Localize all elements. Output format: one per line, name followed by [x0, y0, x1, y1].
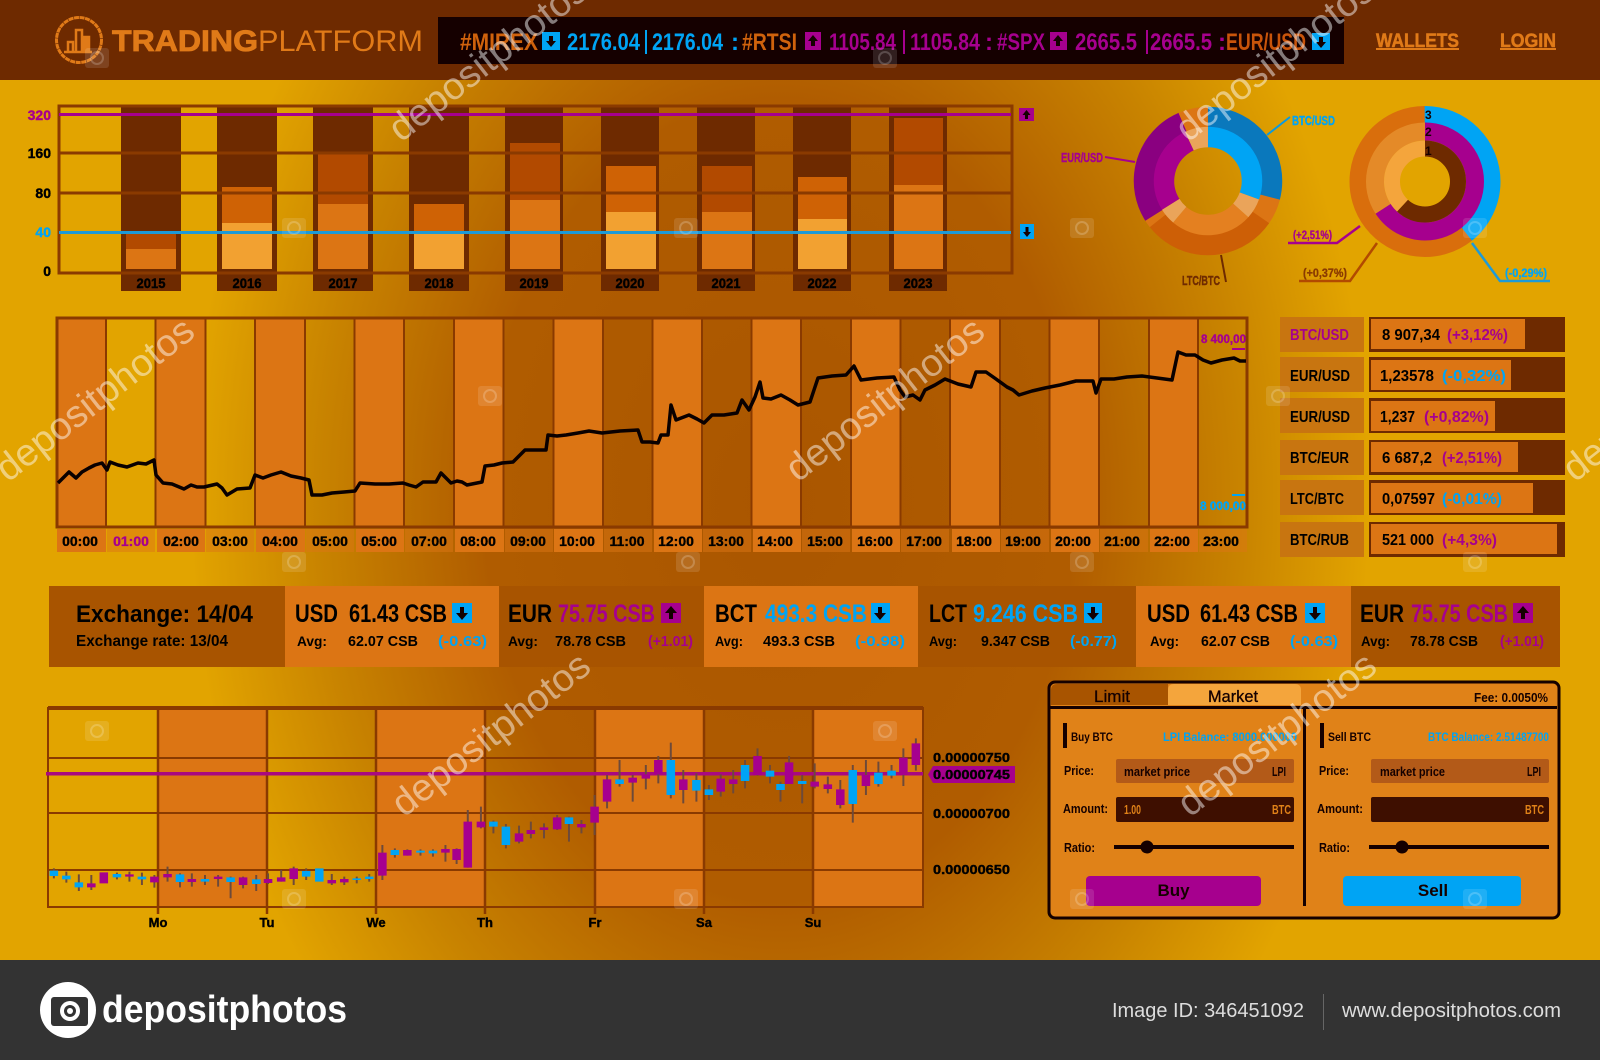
- EUR cell 2: 75.75 CSB: [1411, 600, 1508, 628]
- year labels: 2022: [808, 275, 837, 291]
- chart grid: [59, 106, 1012, 273]
- hour columns: [56, 317, 1199, 528]
- BCT cell: 493.3 CSB: [765, 600, 867, 628]
- USD cell 2: 62.07 CSB: [1201, 633, 1270, 650]
- row EUR/USD 1: (-0,32%): [1442, 368, 1506, 385]
- price line: [58, 352, 1246, 495]
- BCT cell: Avg:: [715, 633, 743, 649]
- row EUR/USD 2: EUR/USD: [1290, 409, 1350, 426]
- row EUR/USD 2: 1,237: [1380, 409, 1415, 426]
- ticker: [438, 17, 1344, 64]
- sell form: BTC: [1525, 802, 1544, 817]
- sell form: Ratio:: [1319, 840, 1350, 855]
- ring numbers: 2: [1425, 125, 1432, 139]
- sell form: Amount:: [1317, 801, 1363, 816]
- donut 1 label: LTC/BTC: LTC/BTC: [1182, 273, 1220, 288]
- hour labels: 18:00: [956, 533, 992, 549]
- donut 2 callout: orange: [1299, 243, 1377, 281]
- weekday labels: Mo: [149, 915, 167, 930]
- USD cell 2: Avg:: [1150, 633, 1179, 649]
- row BTC/USD: (+3,12%): [1447, 327, 1508, 344]
- hour labels: 17:00: [906, 533, 942, 549]
- EUR cell: 75.75 CSB: [558, 600, 655, 628]
- footer brand: depositphotos: [102, 989, 347, 1031]
- hour labels: 11:00: [609, 533, 645, 549]
- row EUR/USD 2: [1280, 398, 1565, 433]
- ticker: #MIREX: [460, 29, 538, 56]
- EUR cell 2: 78.78 CSB: [1410, 633, 1478, 650]
- sell form: [1317, 723, 1549, 906]
- donut 2 callout: orange: (+0,37%): [1303, 266, 1347, 280]
- ticker: #SPX: [997, 29, 1045, 56]
- y axis labels: 0: [43, 263, 51, 279]
- weekday labels: Su: [805, 915, 821, 930]
- row LTC/BTC: [1280, 480, 1565, 515]
- image id: Image ID: 346451092: [1112, 1000, 1304, 1022]
- row BTC/EUR: BTC/EUR: [1290, 450, 1349, 467]
- donut 2 callout: magenta: (+2,51%): [1293, 228, 1332, 242]
- price axis labels: 0.00000700: [933, 806, 1010, 821]
- weekday labels: [149, 915, 821, 930]
- price axis labels: [933, 750, 1010, 877]
- year labels: 2016: [232, 275, 262, 291]
- ticker: 2176.04: [567, 29, 641, 56]
- row LTC/BTC: (-0,01%): [1442, 491, 1502, 508]
- BCT cell: 493.3 CSB: [763, 633, 835, 650]
- hour labels: 05:00: [361, 533, 397, 549]
- high label: 8 400,00: [1201, 332, 1246, 346]
- header bar: [0, 0, 1600, 80]
- LCT cell: LCT: [929, 600, 967, 628]
- hour labels: 22:00: [1154, 533, 1190, 549]
- hour labels: 07:00: [411, 533, 447, 549]
- watermarks: depositphotos: [778, 309, 993, 490]
- hour labels: 04:00: [262, 533, 298, 549]
- year labels: 2015: [136, 275, 166, 291]
- buy form: Buy BTC: [1071, 730, 1113, 744]
- sell form: Sell BTC: [1328, 730, 1371, 744]
- frame and dividers: [57, 318, 1247, 527]
- logo: TRADING: [112, 25, 258, 58]
- ring numbers: [1425, 108, 1432, 158]
- price axis labels: 0.00000750: [933, 750, 1010, 765]
- EUR cell: EUR: [508, 600, 552, 628]
- hour labels: 20:00: [1055, 533, 1091, 549]
- button: buy: Buy: [1157, 881, 1190, 900]
- buy form: Amount:: [1063, 801, 1108, 816]
- EUR cell 2: Avg:: [1361, 633, 1390, 649]
- low label: 8 000,00: [1200, 499, 1246, 513]
- ring numbers: 1: [1425, 144, 1432, 158]
- current price tag: 0.00000745: [933, 767, 1010, 782]
- buy form: market price: [1124, 764, 1190, 779]
- USD cell: USD: [295, 600, 338, 628]
- row EUR/USD 1: EUR/USD: [1290, 368, 1350, 385]
- donut 2 callout: blue: [1472, 243, 1550, 281]
- row BTC/USD: BTC/USD: [1290, 327, 1349, 344]
- EUR cell 2: EUR: [1360, 600, 1404, 628]
- hour labels: 05:00: [312, 533, 348, 549]
- ticker: EUR/USD: [1226, 29, 1306, 56]
- row EUR/USD 1: 1,23578: [1380, 368, 1434, 385]
- buy form: [1063, 723, 1297, 906]
- row BTC/EUR: [1280, 440, 1565, 475]
- USD cell: (-0.63): [438, 633, 487, 650]
- footer bar: [0, 960, 1600, 1060]
- LCT cell: 9.347 CSB: [981, 633, 1050, 650]
- hour labels: 15:00: [807, 533, 843, 549]
- exchange date cell: Exchange: 14/04: [76, 601, 254, 628]
- sell form: Price:: [1319, 763, 1349, 778]
- fee: Fee: 0.0050%: [1474, 690, 1548, 705]
- chart frame and grid: [48, 707, 923, 914]
- hour labels: 10:00: [559, 533, 595, 549]
- hour labels: 23:00: [1203, 533, 1239, 549]
- LCT cell: 9.246 CSB: [973, 600, 1078, 628]
- stacked bar chart: [28, 105, 1034, 291]
- y axis labels: 320: [28, 107, 51, 123]
- hour labels: 02:00: [163, 533, 199, 549]
- EUR cell 2: [1351, 586, 1560, 667]
- donut 1 label: EUR/USD: EUR/USD: [1061, 150, 1103, 165]
- ticker: #RTSI: [742, 29, 797, 56]
- exchange date cell: [49, 586, 285, 667]
- row EUR/USD 2: (+0,82%): [1424, 409, 1489, 426]
- row LTC/BTC: LTC/BTC: [1290, 491, 1344, 508]
- donut 1 label: BTC/USD: BTC/USD: [1292, 113, 1335, 128]
- exchange date cell: Exchange rate: 13/04: [76, 633, 228, 650]
- EUR cell 2: (+1.01): [1500, 633, 1544, 650]
- y axis labels: 80: [35, 185, 51, 201]
- year labels: 2019: [520, 275, 549, 291]
- weekday labels: Th: [477, 915, 493, 930]
- button: buy: [1086, 876, 1261, 906]
- USD cell: 61.43 CSB: [349, 600, 447, 628]
- reference line: upper: [59, 113, 1011, 116]
- tab: limit: [1051, 684, 1168, 706]
- ticker: 2665.5: [1150, 29, 1212, 56]
- ring numbers: 3: [1425, 108, 1432, 122]
- exchange strip: [49, 586, 1560, 667]
- ticker: 1105.84: [910, 29, 981, 56]
- year labels: 2020: [616, 275, 645, 291]
- buy form: 1.00: [1124, 802, 1141, 817]
- row BTC/USD: [1280, 317, 1565, 352]
- sell form: market price: [1380, 764, 1445, 779]
- BCT cell: (-0.98): [855, 633, 905, 650]
- nav: login: LOGIN: [1500, 31, 1556, 52]
- USD cell: [285, 586, 499, 667]
- y axis labels: 40: [35, 224, 51, 240]
- row BTC/RUB: (+4,3%): [1442, 532, 1497, 549]
- tab: market: Market: [1208, 687, 1258, 706]
- nav: wallets: WALLETS: [1376, 31, 1459, 52]
- hour labels: 00:00: [62, 533, 98, 549]
- hour labels: 03:00: [212, 533, 248, 549]
- row LTC/BTC: 0,07597: [1382, 491, 1435, 508]
- pair list: [1280, 317, 1565, 557]
- BCT cell: [704, 586, 918, 667]
- hour labels: 16:00: [857, 533, 893, 549]
- row BTC/EUR: (+2,51%): [1442, 450, 1502, 467]
- current price tag: [928, 766, 1015, 783]
- logo: [56, 18, 423, 62]
- donut 1 label: LTC/BTC: [1182, 255, 1226, 288]
- main line chart: [56, 317, 1247, 552]
- LCT cell: [918, 586, 1136, 667]
- hour labels: [57, 529, 1247, 552]
- day columns: [158, 707, 923, 907]
- current price line: [46, 772, 923, 776]
- USD cell 2: 61.43 CSB: [1200, 600, 1298, 628]
- year labels: 2017: [328, 275, 358, 291]
- donut 2 callout: magenta: [1288, 226, 1360, 243]
- hour labels: 14:00: [757, 533, 793, 549]
- row BTC/EUR: 6 687,2: [1382, 450, 1432, 467]
- donut 2 callout: blue: (-0,29%): [1505, 266, 1547, 280]
- marker: lower: [1020, 224, 1034, 239]
- reference line: lower: [59, 231, 1011, 234]
- button: sell: Sell: [1418, 881, 1448, 900]
- weekday labels: Tu: [260, 915, 275, 930]
- buy form: Ratio:: [1064, 840, 1095, 855]
- bar columns: [121, 105, 947, 291]
- LCT cell: (-0.77): [1070, 633, 1117, 650]
- weekday labels: Fr: [588, 915, 602, 930]
- donut chart 1: [1118, 91, 1298, 271]
- BCT cell: BCT: [715, 600, 757, 628]
- logo: PLATFORM: [258, 25, 423, 58]
- hour labels: 08:00: [460, 533, 496, 549]
- EUR cell: [499, 586, 704, 667]
- buy form: LPI: [1272, 764, 1286, 779]
- hour labels: 13:00: [708, 533, 744, 549]
- row BTC/RUB: BTC/RUB: [1290, 532, 1349, 549]
- footer logo icon: [40, 982, 96, 1038]
- tab: limit: Limit: [1094, 687, 1130, 706]
- buy form: BTC: [1272, 802, 1291, 817]
- weekday labels: Sa: [696, 915, 713, 930]
- ticker: 1105.84: [829, 29, 897, 56]
- buy form: LPI Balance: 8000.000000: [1163, 730, 1297, 744]
- year labels: 2018: [424, 275, 454, 291]
- USD cell: Avg:: [297, 633, 327, 649]
- EUR cell: 78.78 CSB: [555, 633, 626, 650]
- hour labels: 21:00: [1104, 533, 1140, 549]
- hour labels: 09:00: [510, 533, 546, 549]
- ticker: :: [985, 29, 993, 56]
- candlestick chart: [46, 707, 1015, 930]
- ticker: 2176.04: [652, 29, 724, 56]
- USD cell: 62.07 CSB: [348, 633, 418, 650]
- year labels: 2023: [904, 275, 933, 291]
- watermarks: depositphotos: [384, 644, 599, 825]
- USD cell 2: [1136, 586, 1351, 667]
- weekday labels: We: [366, 915, 386, 930]
- USD cell 2: (-0.63): [1290, 633, 1338, 650]
- year labels: 2021: [712, 275, 741, 291]
- ticker: :: [731, 29, 739, 56]
- price axis labels: 0.00000650: [933, 862, 1010, 877]
- donut chart 2: [1331, 87, 1519, 276]
- watermarks: [0, 0, 1600, 825]
- hour labels: 12:00: [658, 533, 694, 549]
- hour labels: 19:00: [1005, 533, 1041, 549]
- order panel: [1049, 682, 1559, 918]
- y axis labels: [28, 107, 51, 279]
- button: sell: [1343, 876, 1521, 906]
- watermark camera icons: [85, 48, 1487, 909]
- buy form: Price:: [1064, 763, 1094, 778]
- marker: upper: [1019, 108, 1034, 121]
- LCT cell: Avg:: [929, 633, 957, 649]
- row BTC/USD: 8 907,34: [1382, 327, 1440, 344]
- donut 1 label: BTC/USD: [1267, 113, 1335, 135]
- row BTC/RUB: [1280, 522, 1565, 557]
- site url: www.depositphotos.com: [1341, 1000, 1561, 1022]
- ticker: 2665.5: [1075, 29, 1137, 56]
- sell form: LPI: [1527, 764, 1541, 779]
- candles: [54, 738, 916, 898]
- tab: market: [1168, 684, 1301, 706]
- hour labels: 01:00: [113, 533, 149, 549]
- sell form: BTC Balance: 2.51487700: [1428, 730, 1549, 744]
- EUR cell: Avg:: [508, 633, 538, 649]
- watermarks: depositphotos: [1170, 644, 1385, 825]
- USD cell 2: USD: [1147, 600, 1190, 628]
- row BTC/RUB: 521 000: [1382, 532, 1434, 549]
- row EUR/USD 1: [1280, 357, 1565, 392]
- y axis labels: 160: [28, 145, 51, 161]
- year labels: [136, 275, 933, 291]
- EUR cell: (+1.01): [648, 633, 693, 650]
- ticker: :: [1218, 29, 1226, 56]
